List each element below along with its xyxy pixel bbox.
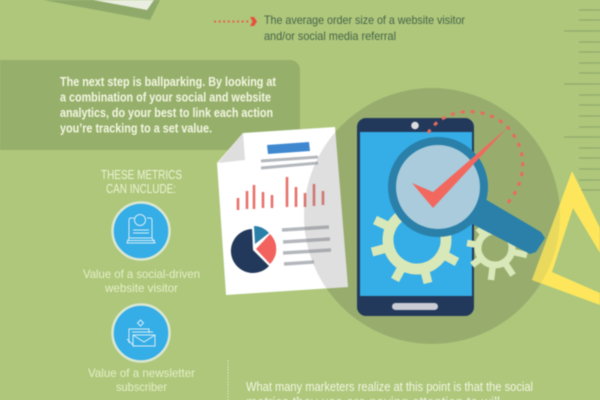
heading: these metrics: THESE METRICS: [101, 168, 182, 182]
heading: these metrics: CAN INCLUDE:: [106, 182, 176, 196]
ruler ticks: [564, 10, 600, 190]
document title bar: [267, 142, 310, 154]
panel: ballparking: [0, 60, 300, 150]
icon: laptop with coin: [112, 202, 170, 260]
label: social-driven visitor: Value of a social-driven: [83, 267, 200, 281]
dotted arc: [428, 112, 523, 206]
icon: smartphone: [357, 118, 474, 316]
text: what many marketers: What many marketers realize at this point is that the social: [246, 380, 533, 394]
panel text: The next step is ballparking. By looking at: [60, 75, 277, 89]
text: average order size: The average order size of a website visitor: [264, 13, 465, 27]
icon: check mark: [412, 128, 507, 208]
panel text: you’re tracking to a set value.: [60, 122, 212, 136]
label: newsletter subscriber: subscriber: [116, 380, 167, 394]
device corner at top: [43, 0, 160, 20]
backdrop circle: [304, 88, 560, 344]
icon: newsletter envelope: [112, 304, 170, 362]
panel text: [60, 75, 277, 136]
text: what many marketers: [246, 380, 533, 400]
icon: large gear: [372, 200, 457, 283]
text: average order size: [264, 13, 465, 43]
label: newsletter subscriber: Value of a newsletter: [88, 366, 195, 380]
document bar chart: [238, 177, 323, 210]
label: social-driven visitor: website visitor: [104, 281, 178, 295]
label: newsletter subscriber: [88, 366, 195, 394]
icon: magnifier: [392, 141, 545, 254]
panel text: analytics, do your best to link each action: [60, 106, 273, 120]
label: social-driven visitor: [83, 267, 200, 295]
document pie chart: [231, 226, 276, 273]
icon: small gear: [467, 228, 527, 280]
icon: report document: [216, 126, 348, 296]
panel text: a combination of your social and website: [60, 90, 271, 104]
arrow: dotted pointer: [214, 17, 257, 26]
icon: yellow triangle: [532, 171, 600, 305]
heading: these metrics: [101, 168, 182, 196]
text: average order size: and/or social media referral: [264, 29, 396, 43]
